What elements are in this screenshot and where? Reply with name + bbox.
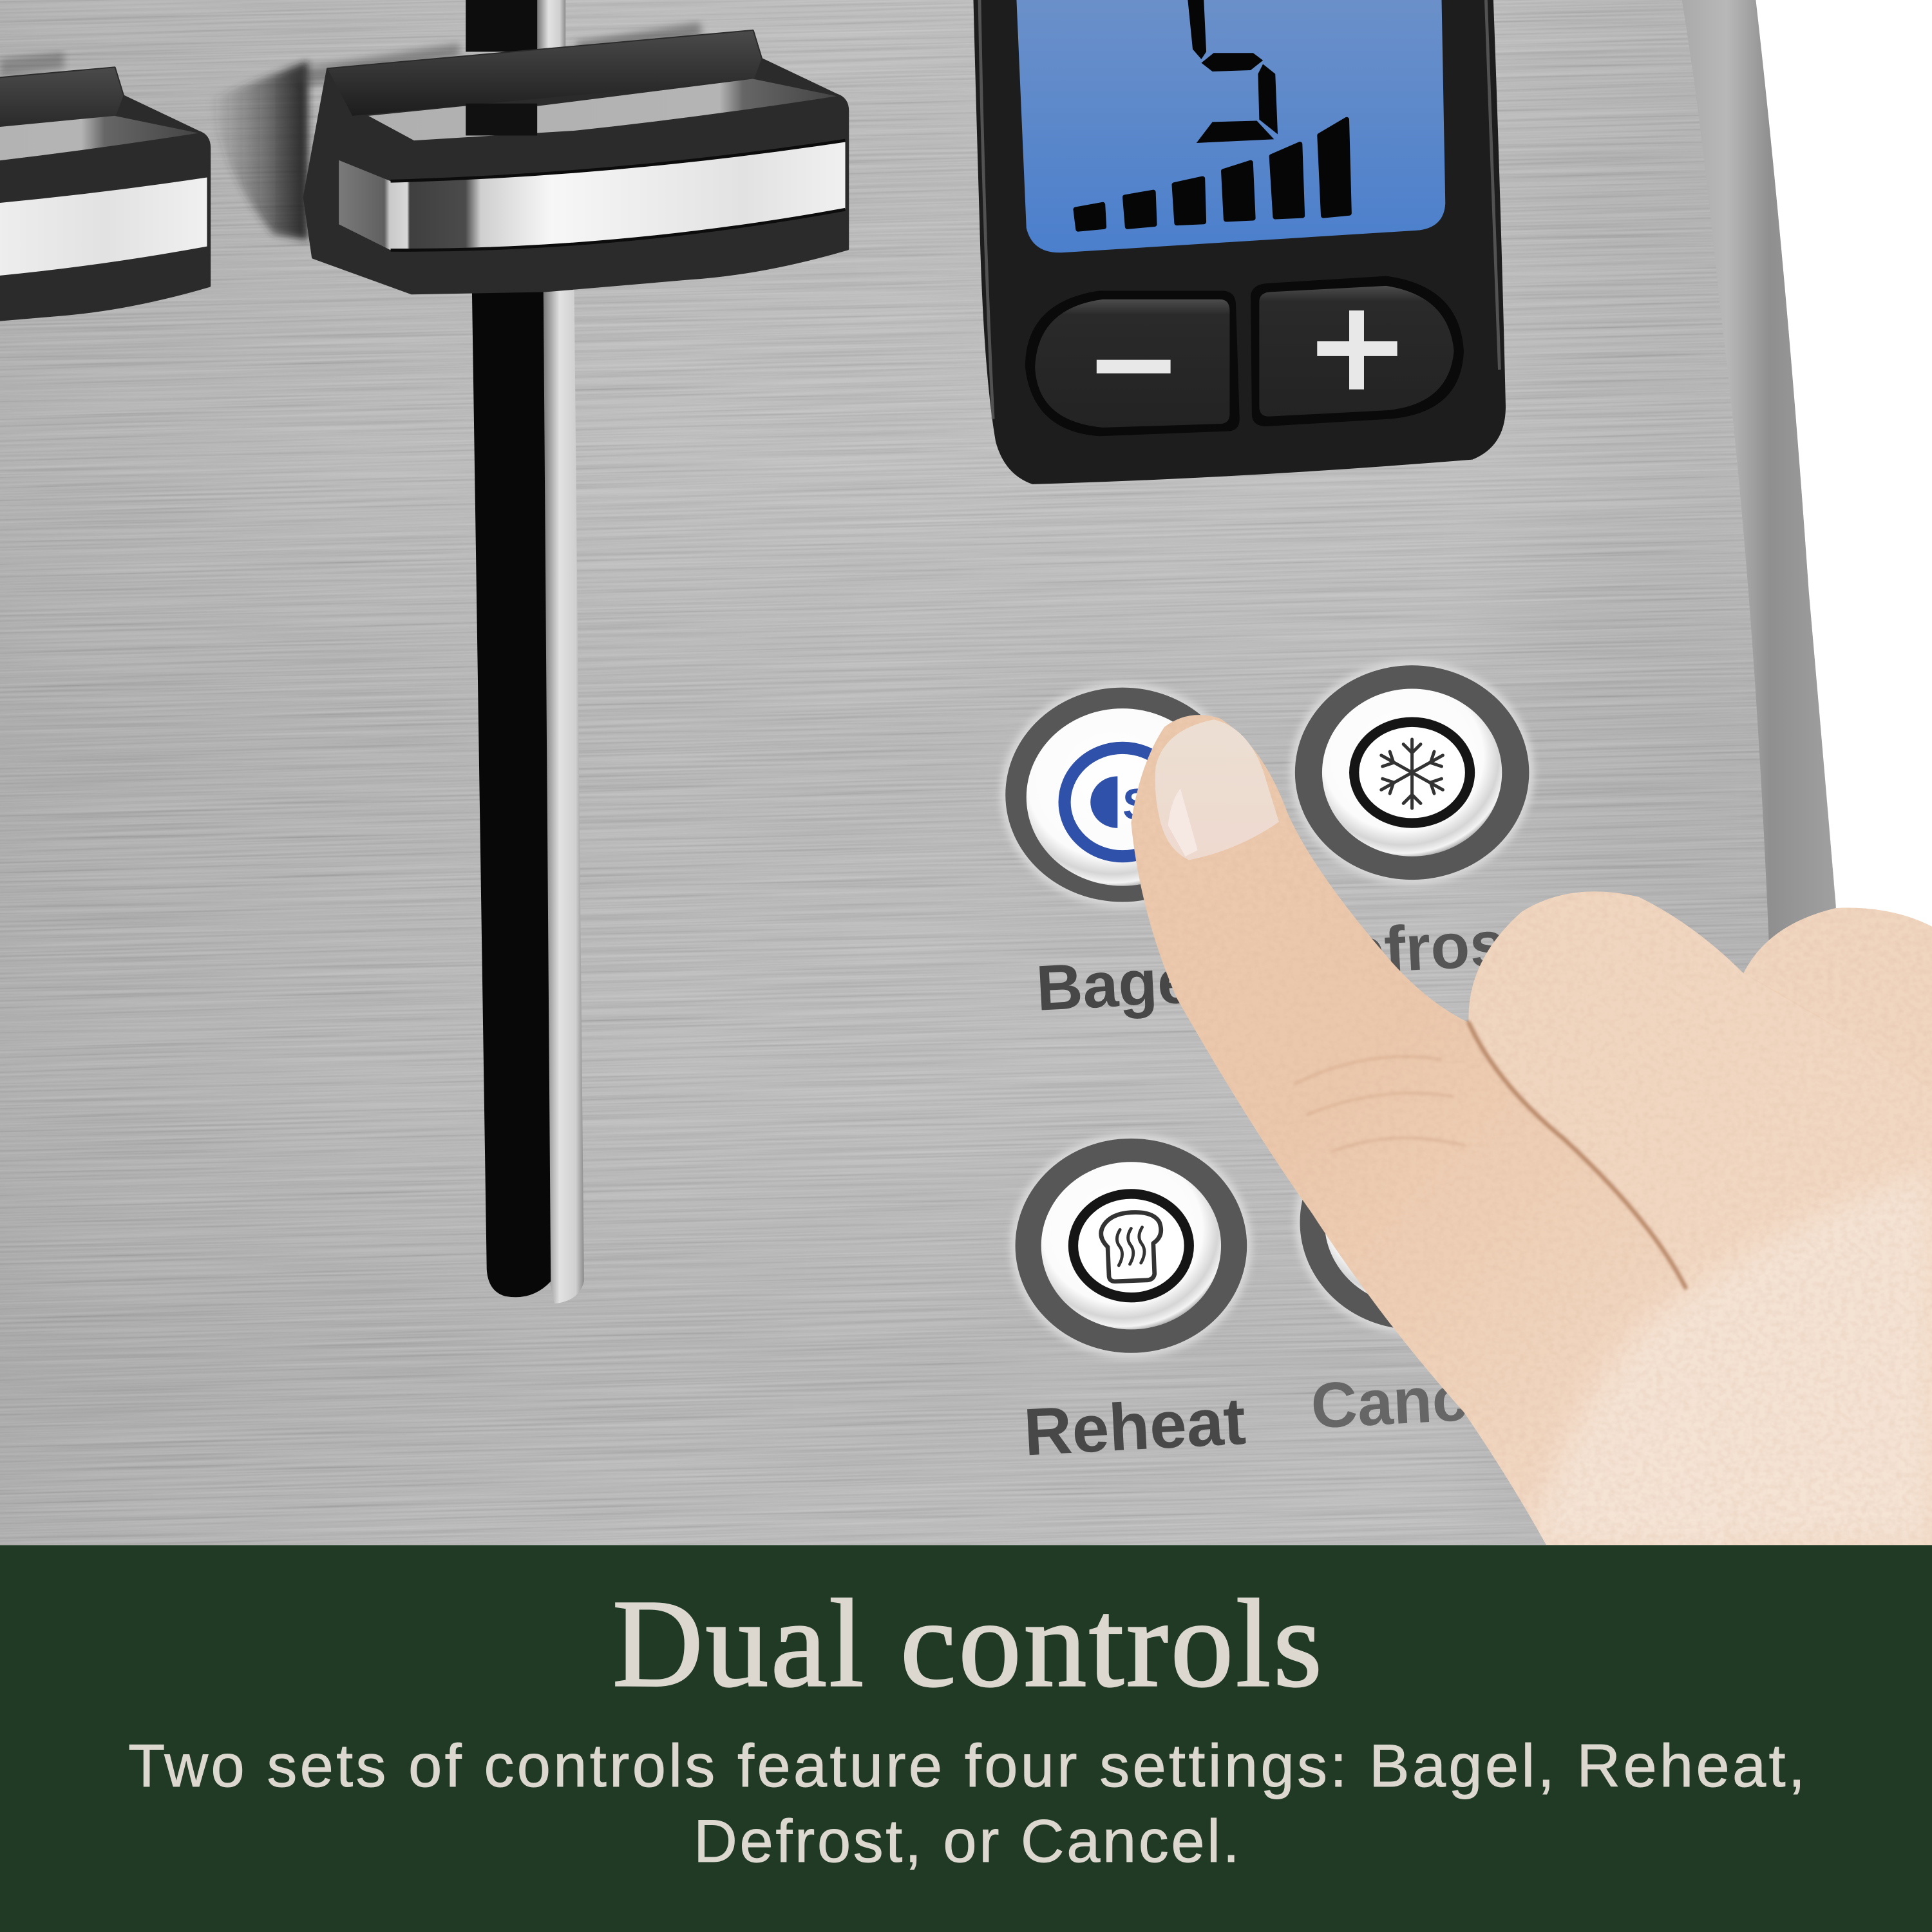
finger separation shadow [1469,1023,1685,1287]
button: cancel [1295,1110,1534,1334]
label: Bagel: Bagel [1034,944,1213,1025]
hand base [1131,715,1932,1545]
slider slot lower [472,286,584,1303]
icon: toast with steam [1101,1212,1161,1282]
display screen [1016,0,1445,252]
nail highlight [1168,788,1198,857]
left slider lever [0,68,209,330]
lever shadow [0,22,703,240]
browning level bars [1075,120,1349,229]
panel: brushed steel toaster body [0,0,1836,1545]
middle finger [1468,891,1932,1545]
finger creases [1294,1057,1466,1152]
bagel half disc icon [1090,776,1117,828]
slot reflection in lever [466,104,537,135]
icon: snowflake [1381,739,1443,808]
display bezel [973,0,1506,484]
lever body [305,31,848,293]
palm highlight [1528,1171,1932,1545]
chrome band outlines [391,140,845,250]
right slider lever [305,31,848,293]
panel: green caption band [0,1545,1932,1932]
plus button [1251,276,1464,426]
slider slot upper [466,0,565,52]
button: bagel [1001,683,1244,907]
description line 1: Two sets of controls feature four settings: Bagel, Reheat, [128,1732,1805,1799]
label: Defrost: Defrost [1301,907,1528,990]
lever top reflection [368,79,837,140]
label: Cancel: Cancel [1309,1360,1523,1442]
button: defrost [1290,661,1534,885]
minus button [1025,291,1240,436]
bagel icon letter: S [1122,779,1152,829]
label: Reheat: Reheat [1022,1383,1247,1470]
ring finger [1743,908,1932,1090]
button: reheat [1010,1133,1252,1358]
chrome band [339,140,845,250]
lever top ridge [328,31,761,116]
digital display housing [973,0,1506,484]
hand pressing the bagel button [1131,708,1932,1545]
digit 5 [1188,0,1278,143]
skin texture [1493,893,1932,1545]
fingernail [1155,719,1279,860]
description line 2: Defrost, or Cancel. [694,1807,1240,1875]
heading: Dual controls [612,1574,1322,1713]
bezel highlights [980,0,1499,419]
